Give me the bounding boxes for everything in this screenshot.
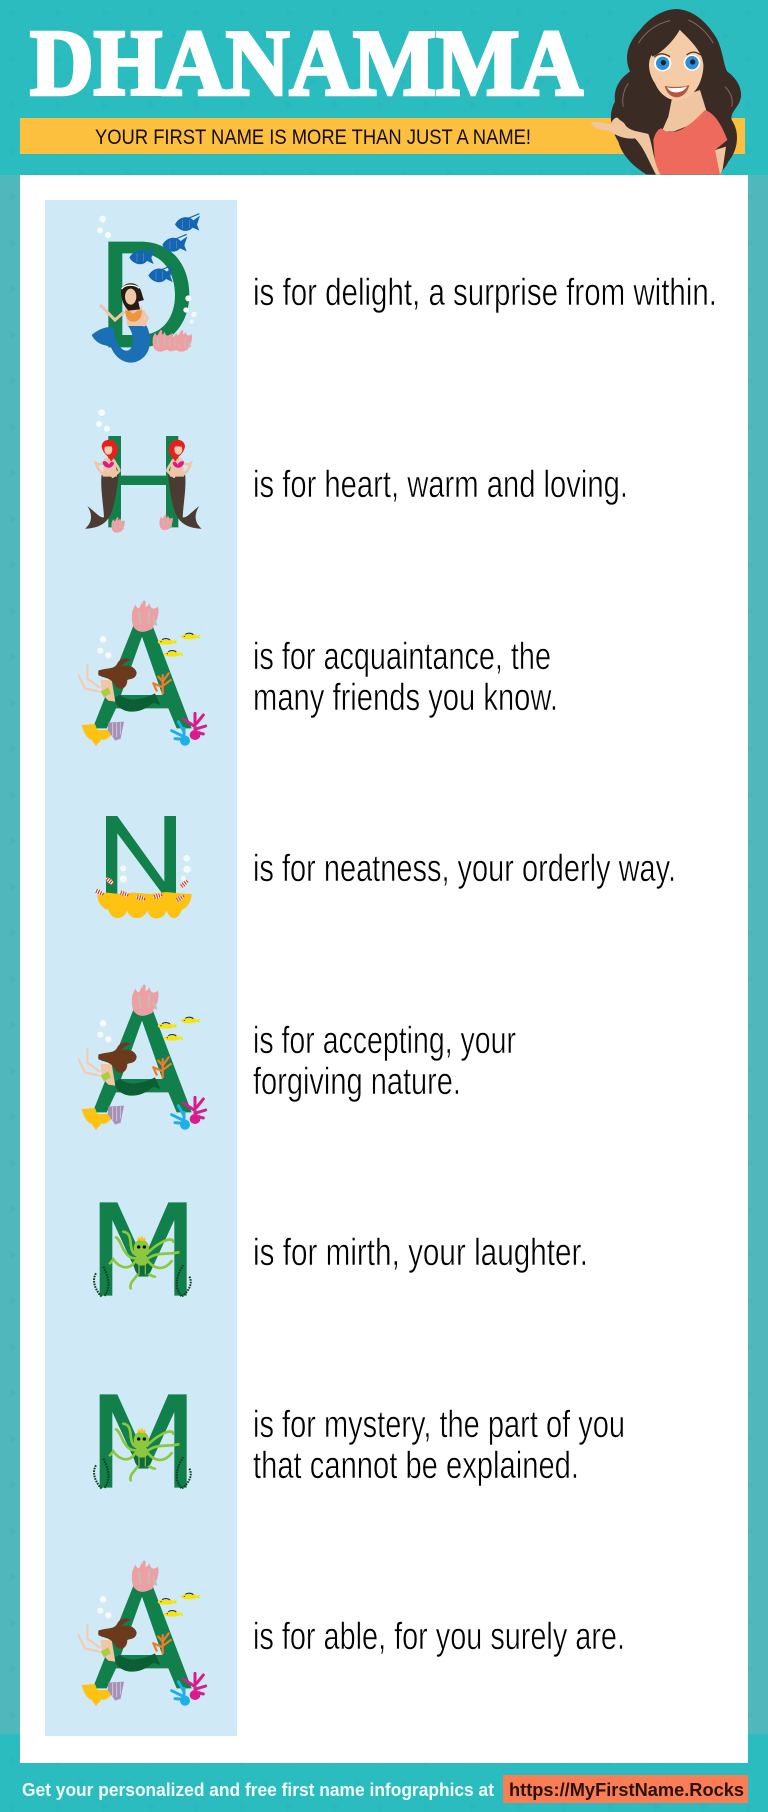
line A — [253, 1020, 516, 1103]
hair — [611, 9, 741, 175]
eyes — [654, 52, 701, 71]
mouth — [665, 85, 689, 97]
icon: letter A — [78, 986, 206, 1130]
neck and chest — [662, 90, 707, 132]
line H: is for heart, warm and loving. — [253, 464, 628, 506]
tagline: YOUR FIRST NAME IS MORE THAN JUST A NAME! — [95, 126, 531, 149]
face — [649, 28, 703, 100]
icon: letter H with mermaids — [85, 409, 202, 533]
line A: is for acquaintance, the — [253, 636, 551, 678]
line A: forgiving nature. — [253, 1061, 461, 1103]
line A: is for accepting, your — [253, 1020, 516, 1062]
icon: letter M with octopus — [94, 1394, 191, 1489]
footer url: https://MyFirstName.Rocks — [509, 1780, 744, 1800]
footer text: Get your personalized and free first name infographics at — [22, 1780, 494, 1800]
line A: is for able, for you surely are. — [253, 1616, 625, 1658]
title: DHANAMMA — [30, 12, 583, 116]
line M: is for mirth, your laughter. — [253, 1232, 588, 1274]
letter column — [45, 200, 237, 1736]
woman character — [591, 9, 741, 175]
icon: letter N — [94, 816, 192, 919]
banner — [20, 118, 745, 154]
footer url — [503, 1775, 748, 1803]
shirt — [653, 110, 727, 175]
line M — [253, 1404, 625, 1487]
line M: that cannot be explained. — [253, 1445, 579, 1487]
line M: is for mystery, the part of you — [253, 1404, 625, 1446]
line A: many friends you know. — [253, 677, 558, 719]
icon: letter A — [78, 1562, 206, 1706]
icon: letter M with octopus — [94, 1202, 191, 1297]
line A — [253, 636, 558, 719]
icon: letter A — [78, 602, 206, 746]
arm — [591, 118, 661, 175]
icon: letter D with mermaid — [92, 214, 200, 363]
